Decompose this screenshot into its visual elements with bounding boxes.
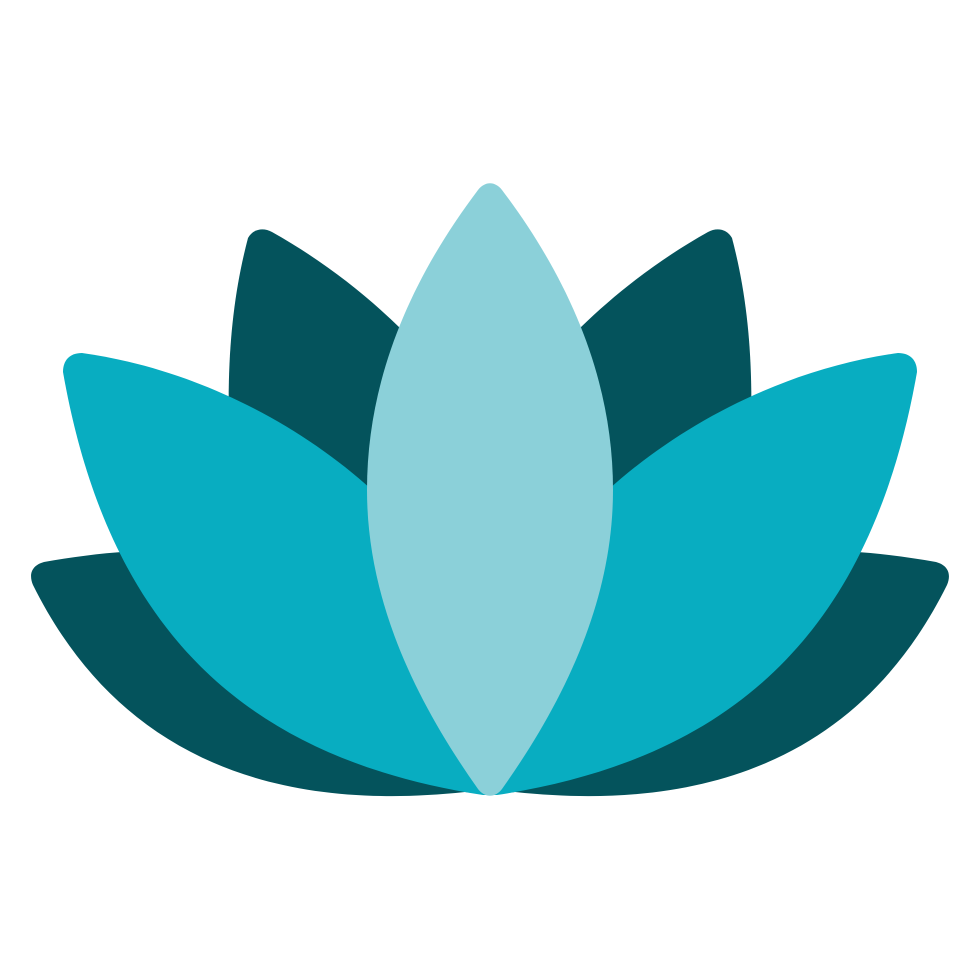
petal: middle left teal: [63, 353, 490, 795]
petal: lower right dark: [490, 550, 949, 796]
petal: upper right dark: [500, 229, 751, 560]
petal: upper left dark: [229, 229, 480, 560]
petal: lower left dark: [31, 550, 490, 796]
petal: middle right teal: [490, 353, 917, 795]
petal: center light: [367, 183, 613, 796]
